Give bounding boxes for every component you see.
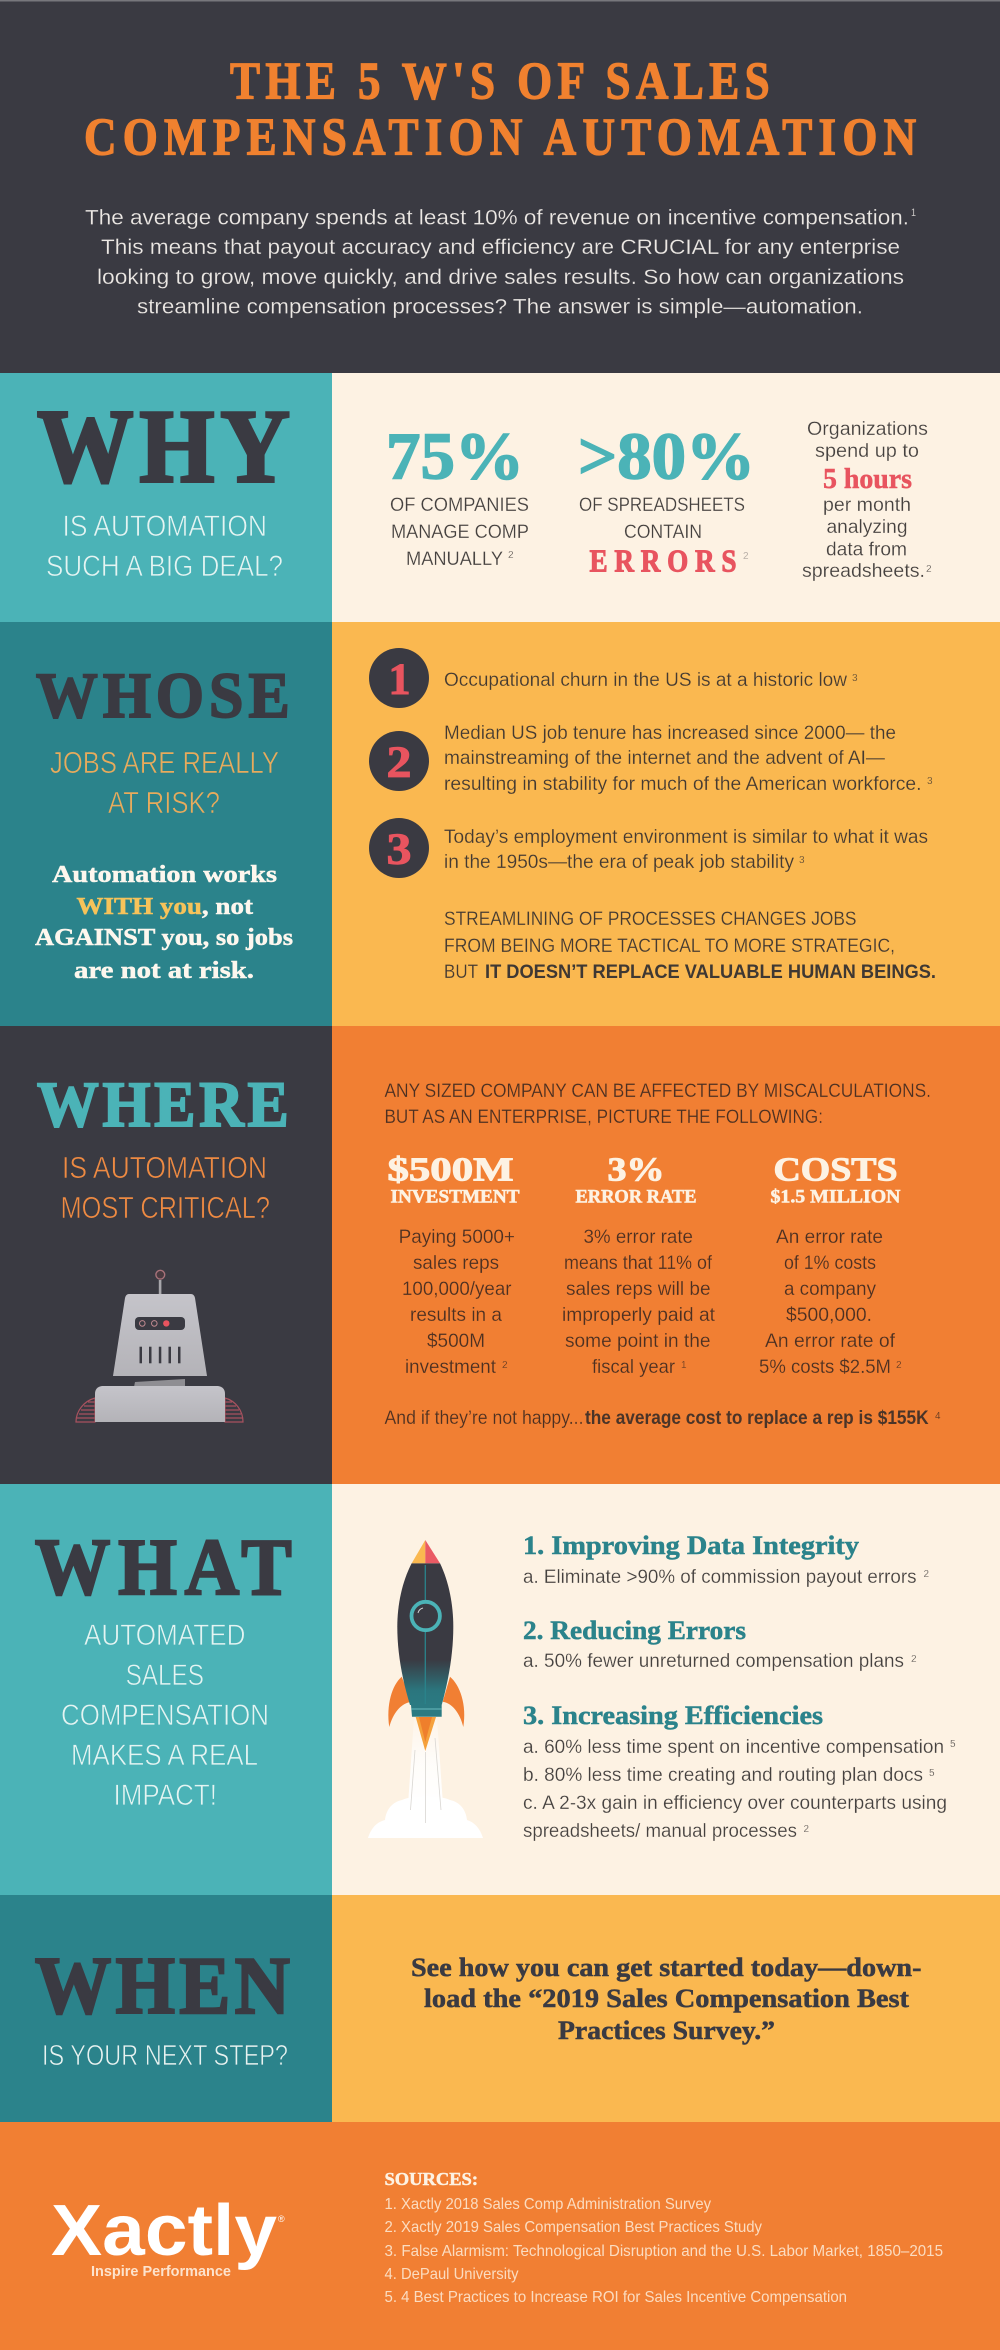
intro text block: The average company spends at least 10% of revenue on incentive compensation.: [85, 206, 909, 230]
column: 3% error rate: 1: [681, 1360, 687, 1371]
title: COMPENSATION AUTOMATION: [84, 107, 916, 166]
column: 3% error rate: sales reps will be: [566, 1278, 710, 1300]
callout: automation works with you: [35, 861, 293, 984]
column: costs $1.5 million: $1.5 MILLION: [770, 1187, 901, 1208]
column: costs $1.5 million: COSTS: [774, 1152, 898, 1188]
callout: automation works with you: Automation works: [52, 861, 277, 888]
column: $500M investment: results in a: [410, 1304, 502, 1326]
icon: rocket: [368, 1540, 483, 1838]
intro text block: streamline compensation processes? The answer is simple—automation.: [137, 296, 863, 318]
subheading: what: IMPACT!: [114, 1779, 217, 1812]
list item 2: mainstreaming of the internet and the advent of AI—: [444, 747, 885, 769]
subheading: whose: JOBS ARE REALLY: [50, 745, 279, 780]
list item 1: 1: [388, 654, 410, 704]
column: $500M investment: INVESTMENT: [390, 1187, 520, 1208]
text block: streamlining: FROM BEING MORE TACTICAL TO MORE STRATEGIC,: [444, 935, 895, 957]
column: 3% error rate: 3%: [608, 1152, 664, 1188]
text block: call to action: See how you can get started today—down-: [411, 1952, 922, 1982]
column: $500M investment: $500M: [427, 1330, 485, 1352]
intro text block: This means that payout accuracy and efficiency are CRUCIAL for any enterprise: [101, 236, 900, 259]
icon: robot: [76, 1270, 243, 1422]
list item 1: [369, 648, 858, 708]
stat: >80%: OF SPREADSHEETS: [579, 494, 745, 516]
callout: replacement cost: And if they’re not happy...: [384, 1407, 584, 1429]
column: costs $1.5 million: of 1% costs: [784, 1252, 876, 1274]
column: 3% error rate: [562, 1152, 716, 1378]
column: $500M investment: sales reps: [413, 1252, 499, 1274]
intro text block: looking to grow, move quickly, and drive sales results. So how can organizations: [97, 266, 904, 289]
list block 3: [523, 1700, 956, 1842]
subheading: whose: [50, 745, 279, 820]
list item 1: Occupational churn in the US is at a historic low: [444, 669, 848, 691]
column: $500M investment: $500M: [388, 1152, 514, 1188]
title: [84, 51, 916, 166]
column: 3% error rate: 3% error rate: [584, 1226, 693, 1248]
panel: when call to action: [332, 1895, 1000, 2122]
column: $500M investment: [388, 1152, 520, 1378]
column: 3% error rate: means that 11% of: [564, 1252, 713, 1274]
text block: call to action: load the “2019 Sales Compensation Best: [424, 1983, 909, 2013]
text block: streamlining: STREAMLINING OF PROCESSES CHANGES JOBS: [444, 908, 856, 930]
stat: 75%: MANAGE COMP: [391, 521, 529, 543]
panel: what list: [332, 1484, 1000, 1895]
subheading: why: [46, 510, 283, 583]
panel: when left: [0, 1895, 332, 2122]
list block 1: [523, 1530, 930, 1588]
logo: Xactly: Inspire Performance: [91, 2264, 231, 2280]
text block: streamlining: IT DOESN’T REPLACE VALUABLE HUMAN BEINGS.: [485, 961, 936, 983]
column: $500M investment: investment: [405, 1356, 497, 1378]
text block: call to action: [411, 1952, 922, 2045]
stat: >80%: 2: [743, 551, 749, 562]
column: 3% error rate: ERROR RATE: [576, 1187, 696, 1208]
column: costs $1.5 million: [759, 1152, 902, 1378]
column: $500M investment: 2: [502, 1360, 508, 1371]
list block 2: 2: [911, 1654, 917, 1665]
list block 2: a. 50% fewer unreturned compensation plans: [523, 1650, 904, 1672]
column: costs $1.5 million: $500,000.: [786, 1304, 872, 1326]
list block 3: 3. Increasing Efficiencies: [523, 1700, 823, 1730]
stat: >80%: ERRORS: [590, 545, 737, 579]
list item 3: 3: [386, 824, 412, 874]
panel: where details: [332, 1026, 1000, 1484]
stat: >80%: [578, 420, 755, 579]
list item 1: 3: [852, 673, 858, 684]
title: THE 5 W'S OF SALES: [230, 51, 770, 110]
panel: whose list: [332, 622, 1000, 1026]
text block: streamlining: BUT: [444, 961, 478, 983]
column: 3% error rate: improperly paid at: [562, 1304, 716, 1326]
stat: 5 hours: Organizations: [807, 418, 928, 440]
subheading: what: [61, 1619, 269, 1812]
subheading: where: IS AUTOMATION: [62, 1150, 267, 1185]
heading: WHAT: WHAT: [35, 1522, 292, 1612]
sources: 1. Xactly 2018 Sales Comp Administration Survey: [384, 2196, 711, 2213]
stat: 5 hours: per month: [823, 494, 911, 516]
logo: Xactly: ®: [278, 2214, 285, 2224]
list item 3: 3: [799, 855, 805, 866]
subheading: where: [60, 1150, 270, 1225]
stat: >80%: >80%: [578, 420, 755, 494]
column: costs $1.5 million: An error rate of: [765, 1330, 896, 1352]
list item 2: Median US job tenure has increased since 2000— the: [444, 722, 896, 744]
list block 3: 5: [950, 1739, 956, 1750]
callout: replacement cost: 4: [935, 1411, 941, 1422]
subheading: what: COMPENSATION: [61, 1699, 269, 1732]
callout: automation works with you: WITH you , not: [76, 893, 254, 920]
subheading: what: AUTOMATED: [84, 1619, 246, 1652]
list item 2: 2: [386, 738, 412, 786]
list block 1: 1. Improving Data Integrity: [523, 1530, 859, 1560]
panel: header: [0, 0, 1000, 373]
panel: why stats: [332, 373, 1000, 622]
panel: footer: [0, 2122, 1000, 2350]
heading: WHERE: WHERE: [37, 1069, 289, 1140]
text block: where intro: BUT AS AN ENTERPRISE, PICTURE THE FOLLOWING:: [384, 1106, 823, 1128]
column: costs $1.5 million: 5% costs $2.5M: [759, 1356, 891, 1378]
heading: WHOSE: WHOSE: [36, 660, 290, 731]
stat: 5 hours: analyzing: [826, 516, 908, 538]
column: 3% error rate: fiscal year: [592, 1356, 675, 1378]
sources: 3. False Alarmism: Technological Disruption and the U.S. Labor Market, 1850–2015: [384, 2243, 943, 2260]
list block 3: a. 60% less time spent on incentive compensation: [523, 1736, 944, 1758]
text block: streamlining: [444, 908, 936, 983]
subheading: why: IS AUTOMATION: [62, 510, 267, 543]
list block 3: b. 80% less time creating and routing plan docs: [523, 1764, 923, 1786]
heading: WHEN: WHEN: [35, 1941, 290, 2032]
heading: WHY: WHY: [37, 388, 290, 504]
intro text block: 1: [911, 207, 916, 219]
list item 2: 3: [927, 776, 933, 787]
list block 3: 5: [929, 1768, 935, 1779]
list item 3: Today’s employment environment is similar to what it was: [444, 826, 928, 848]
stat: 5 hours: 2: [926, 564, 932, 575]
logo: Xactly: Xactly: [51, 2191, 277, 2271]
list block 3: c. A 2-3x gain in efficiency over counterparts using: [523, 1792, 947, 1814]
stat: 75%: 2: [508, 550, 514, 561]
text block: where intro: [384, 1080, 931, 1128]
list block 2: [523, 1615, 917, 1672]
panel: why left: [0, 373, 332, 622]
callout: replacement cost: [384, 1407, 941, 1429]
stat: 75%: 75%: [386, 420, 524, 494]
stat: 75%: OF COMPANIES: [390, 494, 529, 516]
sources: SOURCES:: [384, 2169, 478, 2189]
list block 3: 2: [804, 1824, 810, 1835]
sources: 2. Xactly 2019 Sales Compensation Best Practices Study: [384, 2219, 762, 2236]
intro text block: [85, 206, 916, 318]
list item 2: resulting in stability for much of the American workforce.: [444, 773, 922, 795]
stat: 5 hours: data from: [826, 538, 907, 560]
callout: replacement cost: the average cost to replace a rep is $155K: [585, 1407, 929, 1429]
subheading: what: SALES: [126, 1659, 204, 1692]
column: $500M investment: Paying 5000+: [399, 1226, 515, 1248]
panel: where left: [0, 1026, 332, 1484]
panel: whose left: [0, 622, 332, 1026]
column: 3% error rate: some point in the: [565, 1330, 710, 1352]
list item 3: [369, 818, 928, 878]
list block 1: 2: [924, 1569, 930, 1580]
sources: [384, 2169, 943, 2306]
stat: 5 hours: spend up to: [815, 440, 919, 462]
list block 2: 2. Reducing Errors: [523, 1615, 746, 1645]
subheading: where: MOST CRITICAL?: [60, 1190, 270, 1225]
subheading: why: SUCH A BIG DEAL?: [46, 550, 283, 583]
column: costs $1.5 million: An error rate: [776, 1226, 883, 1248]
stat: 5 hours: 5 hours: [823, 464, 912, 495]
text block: where intro: ANY SIZED COMPANY CAN BE AFFECTED BY MISCALCULATIONS.: [384, 1080, 931, 1102]
column: costs $1.5 million: a company: [784, 1278, 876, 1300]
list block 3: spreadsheets/ manual processes: [523, 1820, 797, 1842]
callout: automation works with you: AGAINST you, so jobs: [35, 924, 293, 951]
subheading: when: IS YOUR NEXT STEP?: [42, 2040, 288, 2072]
list item 3: in the 1950s—the era of peak job stability: [444, 851, 794, 873]
list item 2: [369, 722, 933, 795]
column: $500M investment: 100,000/year: [402, 1278, 512, 1300]
text block: call to action: Practices Survey.”: [558, 2015, 775, 2045]
stat: 75%: MANUALLY: [406, 548, 503, 570]
callout: automation works with you: are not at risk.: [74, 957, 254, 984]
stat: 5 hours: spreadsheets.: [802, 560, 925, 582]
list block 1: a. Eliminate >90% of commission payout errors: [523, 1566, 917, 1588]
stat: >80%: CONTAIN: [624, 521, 702, 543]
subheading: whose: AT RISK?: [108, 785, 220, 820]
column: costs $1.5 million: 2: [896, 1360, 902, 1371]
stat: 5 hours: [802, 418, 932, 582]
sources: 4. DePaul University: [384, 2266, 518, 2283]
sources: 5. 4 Best Practices to Increase ROI for Sales Incentive Compensation: [384, 2289, 847, 2306]
subheading: what: MAKES A REAL: [71, 1739, 258, 1772]
panel: what left: [0, 1484, 332, 1895]
stat: 75%: [386, 420, 529, 570]
